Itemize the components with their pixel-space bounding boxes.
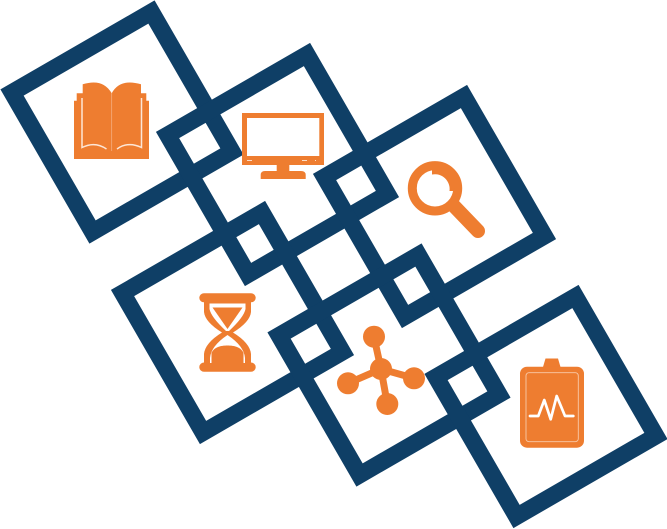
icon: computer monitor [242,113,324,179]
icon: magnifying glass [412,166,478,231]
panel: book square [12,12,232,232]
icon: hourglass [199,293,256,372]
panel: clipboard square [436,297,656,516]
panel: monitor square [168,55,387,274]
icon: open book [74,82,149,159]
icon: molecule network [337,326,425,415]
panel: magnifier square [325,97,544,316]
icon: clipboard with pulse [520,358,584,448]
panel: molecule square [279,255,499,475]
panel: hourglass square [123,213,342,432]
